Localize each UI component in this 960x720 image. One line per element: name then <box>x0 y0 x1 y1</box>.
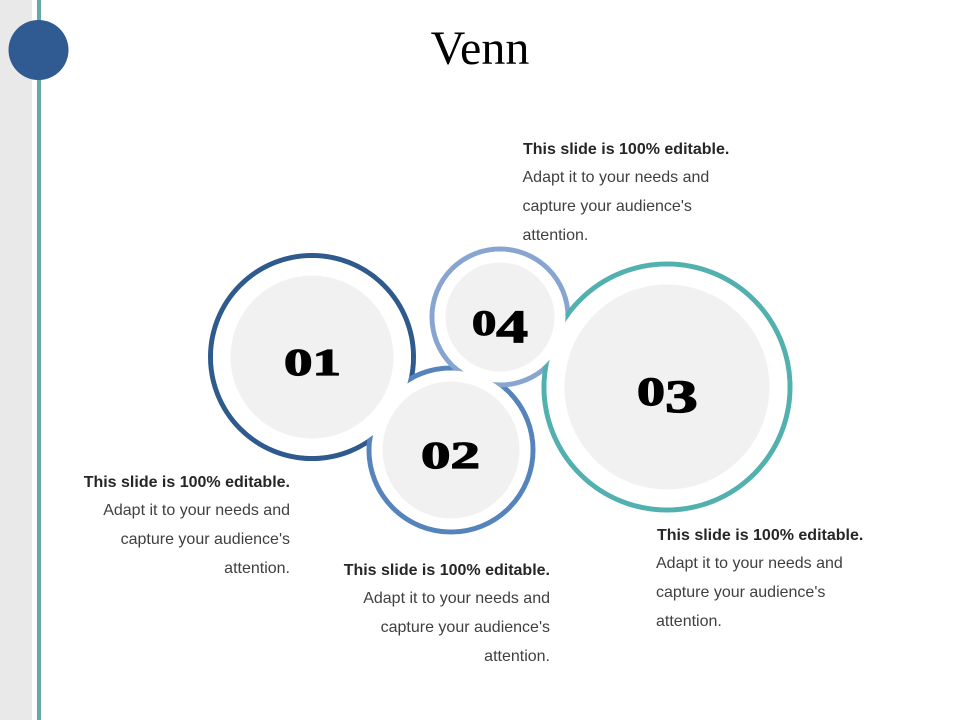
ring 2 <box>369 368 533 532</box>
grey disc 3 <box>564 284 770 490</box>
venn diagram <box>210 249 790 532</box>
number 01: 01 <box>284 342 341 384</box>
text block: top: This slide is 100% editable. <box>523 141 729 158</box>
grey disc 2 <box>382 382 520 518</box>
text block: right: attention. <box>656 613 722 630</box>
sidebar band <box>0 0 32 720</box>
number 03: 0 <box>637 370 665 414</box>
ring 1 <box>210 256 414 458</box>
title: Venn <box>431 22 529 75</box>
text block: bottom centre: This slide is 100% editable. <box>344 562 550 579</box>
icon: header circle <box>8 20 68 80</box>
text block: right: capture your audience's <box>656 584 825 601</box>
white disc 2 <box>372 370 530 530</box>
text block: left <box>84 474 290 577</box>
text block: right: Adapt it to your needs and <box>656 555 843 572</box>
number 02: 02 <box>421 434 480 476</box>
text block: right: This slide is 100% editable. <box>657 527 863 544</box>
text block: left: Adapt it to your needs and <box>103 502 290 519</box>
text block: bottom centre: attention. <box>484 648 550 665</box>
text block: top: Adapt it to your needs and <box>522 169 709 186</box>
grey disc 1 <box>230 276 394 438</box>
white disc 3 <box>546 266 788 508</box>
text block: top: capture your audience's <box>522 198 692 215</box>
number 04: 4 <box>496 301 528 353</box>
text block: bottom centre <box>344 562 550 665</box>
number 04: 0 <box>472 304 496 343</box>
ring 4 <box>432 249 568 385</box>
text block: left: This slide is 100% editable. <box>84 474 290 491</box>
white disc 1 <box>213 258 411 456</box>
number 03: 3 <box>665 371 698 423</box>
text block: right <box>656 527 863 630</box>
text block: left: capture your audience's <box>121 531 290 548</box>
text block: left: attention. <box>224 560 290 577</box>
ring 3 <box>544 264 790 510</box>
white disc 4 <box>434 252 566 382</box>
sidebar teal line <box>37 0 41 720</box>
text block: top <box>522 141 729 244</box>
text block: top: attention. <box>522 227 588 244</box>
grey disc 4 <box>446 262 554 372</box>
text block: bottom centre: capture your audience's <box>381 619 550 636</box>
text block: bottom centre: Adapt it to your needs and <box>363 590 550 607</box>
